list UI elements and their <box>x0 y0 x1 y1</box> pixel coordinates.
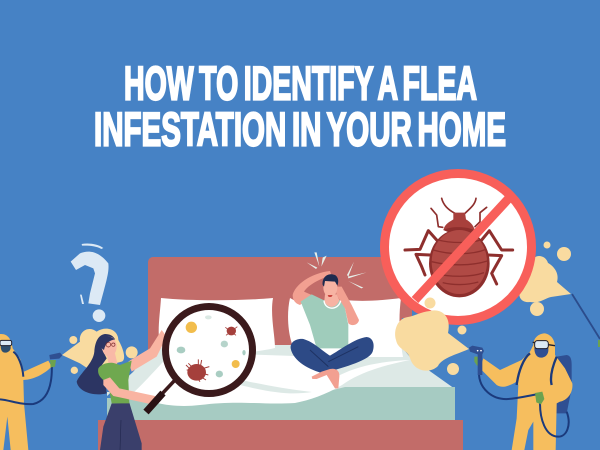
hose <box>479 375 569 437</box>
near arm <box>335 287 359 325</box>
spray gun <box>469 346 484 375</box>
duvet fold <box>173 367 312 393</box>
feet <box>312 369 339 388</box>
sheet <box>107 345 455 420</box>
icon: small bug <box>225 327 237 335</box>
straps <box>517 353 557 385</box>
left pillow <box>159 298 275 354</box>
icon: large bug <box>186 359 209 382</box>
left exterminator <box>0 334 62 450</box>
bug head <box>443 213 475 237</box>
white duvet <box>133 352 410 406</box>
mask and goggles <box>1 346 11 353</box>
woman <box>77 330 167 450</box>
backpack <box>557 355 572 413</box>
bed base <box>98 420 463 450</box>
prohibition slash <box>415 197 510 300</box>
long hair <box>77 334 115 394</box>
stress marks <box>307 252 367 288</box>
backpack strap <box>13 352 23 377</box>
left spray cloud <box>62 329 138 374</box>
right spray wand <box>572 294 600 339</box>
shirt <box>301 294 348 348</box>
face <box>102 337 117 357</box>
gloves <box>535 392 544 404</box>
far arm raised to head <box>293 271 332 305</box>
right spray cloud <box>519 242 571 316</box>
hose <box>0 362 52 404</box>
germ spots <box>177 315 246 377</box>
spray gun <box>49 353 62 359</box>
headboard <box>148 257 412 400</box>
fringe <box>102 337 115 350</box>
no bed bug sign <box>384 174 532 320</box>
neck <box>107 353 117 367</box>
shirt <box>98 361 132 403</box>
pants <box>100 403 142 450</box>
mattress <box>107 387 455 420</box>
neck <box>324 294 339 307</box>
near arm <box>103 377 155 405</box>
magnifying glass <box>146 306 252 412</box>
bug body <box>429 229 490 297</box>
handle <box>160 380 175 396</box>
suit <box>480 333 572 450</box>
far arm <box>128 330 167 372</box>
bed <box>98 257 463 450</box>
head <box>323 277 337 297</box>
main spray cloud <box>395 298 469 375</box>
title <box>94 56 506 156</box>
icon: bed bug <box>405 198 513 297</box>
crossed legs <box>291 337 374 373</box>
mask and goggles <box>534 348 548 358</box>
right exterminator <box>469 333 572 450</box>
glove <box>50 360 56 367</box>
glove at right edge <box>598 340 600 347</box>
hair <box>323 274 338 287</box>
suit <box>0 334 52 450</box>
man sitting on bed <box>291 252 374 388</box>
glasses <box>106 342 111 347</box>
right pillow <box>288 298 403 357</box>
question mark <box>71 243 109 322</box>
